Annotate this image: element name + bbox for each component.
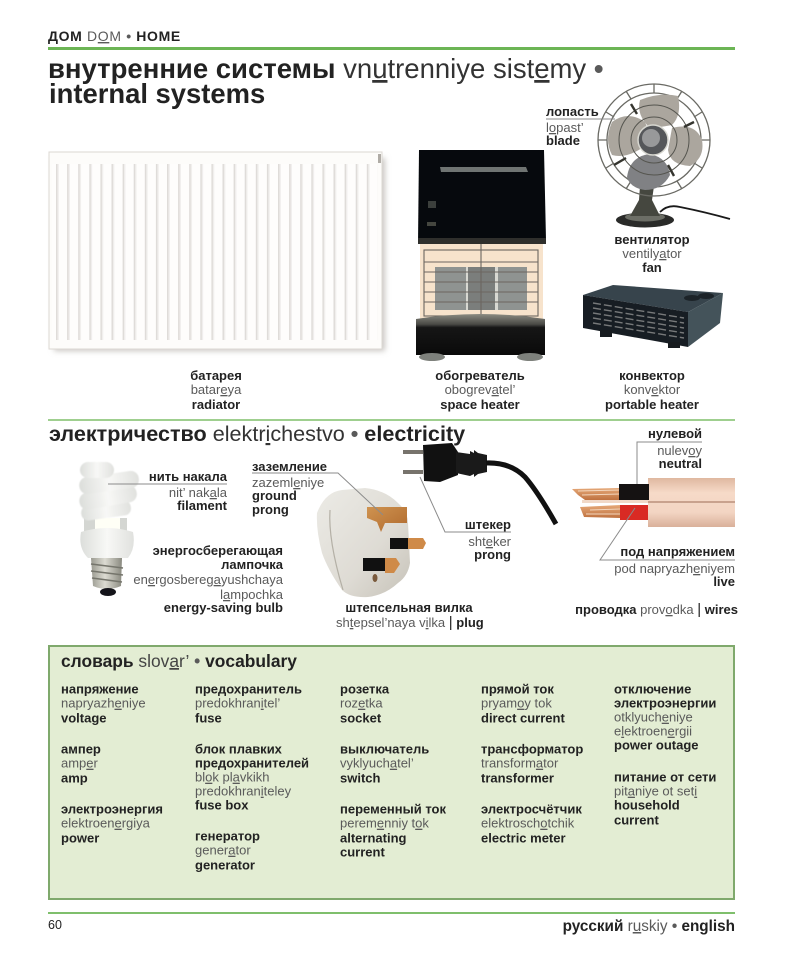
vocabulary column 3: alternating — [340, 831, 407, 846]
electricity divider — [48, 419, 735, 421]
callout: filament: нить накала — [149, 469, 228, 484]
radiator caption: radiator — [192, 397, 240, 412]
vocabulary column 4: прямой ток — [481, 682, 554, 697]
vocabulary column 5 — [614, 682, 716, 828]
bulb caption: energy-saving bulb — [164, 600, 283, 615]
plug caption: штепсельная вилка — [345, 600, 473, 615]
space heater illustration — [416, 150, 546, 361]
plug caption: shtepsel’naya vilka | plug — [336, 614, 484, 631]
vocabulary column 4: электросчётчик — [481, 802, 582, 817]
footer: русский ruskiy • english — [563, 918, 735, 935]
vocabulary column 2: predokhranitel’ — [195, 696, 280, 711]
vocabulary column 2: генератор — [195, 829, 260, 844]
portable heater illustration — [583, 285, 723, 348]
vocabulary column 5: otklyucheniye — [614, 710, 693, 725]
portable heater caption: konvektor — [624, 382, 681, 397]
bulb caption: lampochka — [220, 587, 284, 602]
vocabulary column 1: ампер — [61, 742, 101, 757]
portable heater caption — [605, 368, 699, 412]
vocabulary column 5: current — [614, 813, 659, 828]
vocabulary column 5: электроэнергии — [614, 696, 716, 711]
radiator caption: batareya — [191, 382, 242, 397]
bulb caption: энергосберегающая — [153, 543, 283, 558]
space heater caption: obogrevatel’ — [445, 382, 516, 397]
space heater caption — [435, 368, 525, 412]
vocabulary column 1: amper — [61, 756, 99, 771]
footer: 60 — [48, 918, 62, 932]
vocabulary column 2: блок плавких — [195, 742, 283, 757]
bulb caption — [133, 543, 284, 615]
callout: plug prong — [420, 477, 512, 562]
panel: vocabulary — [49, 646, 734, 899]
vocabulary column 5: питание от сети — [614, 770, 716, 785]
wires caption: проводка provodka | wires — [575, 601, 738, 618]
vocabulary column 5: pitaniye ot seti — [614, 784, 697, 799]
callout: plug prong: shteker — [468, 534, 512, 549]
section header — [48, 28, 735, 50]
callout: ground prong: заземление — [252, 459, 327, 474]
vocabulary column 4: трансформатор — [481, 742, 583, 757]
vocabulary column 2 — [195, 682, 309, 873]
vocabulary column 4: direct current — [481, 711, 565, 726]
callout: neutral — [637, 426, 702, 484]
vocabulary column 3: vyklyuchatel’ — [340, 756, 414, 771]
vocabulary column 4: transformator — [481, 756, 559, 771]
vocabulary column 1: voltage — [61, 711, 107, 726]
callout: live: под напряжением — [620, 544, 735, 559]
vocabulary column 1: amp — [61, 771, 88, 786]
title: внутренние системы vnutrenniye sistemy • — [48, 53, 603, 84]
radiator caption — [190, 368, 242, 412]
radiator caption: батарея — [190, 368, 242, 383]
vocabulary column 3 — [340, 682, 446, 860]
radiator illustration — [49, 152, 385, 351]
electricity heading: электричество elektrichestvo • electricity — [49, 421, 465, 446]
vocabulary column 2: fuse — [195, 711, 222, 726]
section header: ДОМ DOM • HOME — [48, 28, 181, 44]
vocabulary column 3: выключатель — [340, 742, 429, 757]
callout: filament: filament — [177, 498, 228, 513]
callout: neutral: nulevoy — [657, 443, 702, 458]
callout: neutral: neutral — [659, 456, 702, 471]
vocabulary column 1: power — [61, 831, 99, 846]
bulb caption: лампочка — [221, 557, 284, 572]
fan illustration — [598, 84, 730, 228]
vocabulary column 4: pryamoy tok — [481, 696, 552, 711]
vocabulary column 2: предохранитель — [195, 682, 302, 697]
vocabulary column 1: электроэнергия — [61, 802, 163, 817]
vocabulary column 3: rozetka — [340, 696, 383, 711]
vocabulary column 2: предохранителей — [195, 756, 309, 771]
energy-saving bulb illustration — [78, 462, 140, 596]
fan caption — [614, 232, 690, 275]
fan caption: ventilyator — [622, 246, 682, 261]
title — [48, 53, 603, 109]
callout: blade: лопасть — [546, 104, 599, 119]
callout: live: live — [713, 574, 735, 589]
bulb caption: energosberegayushchaya — [133, 572, 284, 587]
vocabulary column 3: peremenniy tok — [340, 816, 429, 831]
callout: plug prong: штекер — [465, 517, 511, 532]
footer — [48, 912, 735, 935]
vocabulary column 1: elektroenergiya — [61, 816, 151, 831]
vocabulary column 5: household — [614, 798, 680, 813]
space heater caption: space heater — [440, 397, 520, 412]
vocabulary column 1: напряжение — [61, 682, 139, 697]
vocabulary column 3: розетка — [340, 682, 390, 697]
callout: live: pod napryazheniyem — [614, 561, 735, 576]
portable heater caption: конвектор — [619, 368, 685, 383]
euro plug illustration — [403, 443, 556, 524]
vocabulary column 1: napryazheniye — [61, 696, 146, 711]
portable heater caption: portable heater — [605, 397, 699, 412]
vocabulary column 3: переменный ток — [340, 802, 446, 817]
callout: blade: blade — [546, 133, 580, 148]
callout: ground prong: ground — [252, 488, 297, 503]
callout: filament — [108, 469, 228, 513]
UK plug illustration — [317, 488, 426, 597]
vocabulary column 2: generator — [195, 843, 251, 858]
vocabulary column 3: current — [340, 845, 385, 860]
vocabulary column 4 — [481, 682, 583, 846]
wires illustration — [572, 478, 735, 527]
vocabulary column 3: socket — [340, 711, 382, 726]
vocabulary column 5: power outage — [614, 738, 699, 753]
vocabulary column 4: elektroschotchik — [481, 816, 575, 831]
space heater caption: обогреватель — [435, 368, 525, 383]
callout: blade: lopast’ — [546, 120, 584, 135]
callout: blade — [546, 104, 615, 148]
vocabulary column 4: transformer — [481, 771, 554, 786]
title: internal systems — [49, 78, 265, 109]
vocabulary column 1 — [61, 682, 163, 846]
vocabulary column 2: predokhraniteley — [195, 784, 292, 799]
vocabulary column 2: fuse box — [195, 798, 249, 813]
callout: filament: nit’ nakala — [169, 485, 228, 500]
vocabulary column 3: switch — [340, 771, 381, 786]
fan caption: fan — [642, 260, 662, 275]
vocabulary column 5: elektroenergii — [614, 724, 692, 739]
vocabulary column 5: отключение — [614, 682, 691, 697]
callout: live — [600, 508, 735, 589]
callout: plug prong: prong — [474, 547, 511, 562]
callout: ground prong: prong — [252, 502, 289, 517]
vocabulary column 4: electric meter — [481, 831, 566, 846]
fan caption: вентилятор — [614, 232, 690, 247]
plug caption — [336, 600, 484, 631]
vocabulary column 2: blok plavkikh — [195, 770, 269, 785]
vocabulary column 2: generator — [195, 858, 255, 873]
callout: ground prong — [252, 459, 383, 517]
callout: neutral: нулевой — [648, 426, 702, 441]
callout: ground prong: zazemleniye — [252, 475, 324, 490]
vocabulary heading: словарь slovar’ • vocabulary — [61, 651, 297, 671]
